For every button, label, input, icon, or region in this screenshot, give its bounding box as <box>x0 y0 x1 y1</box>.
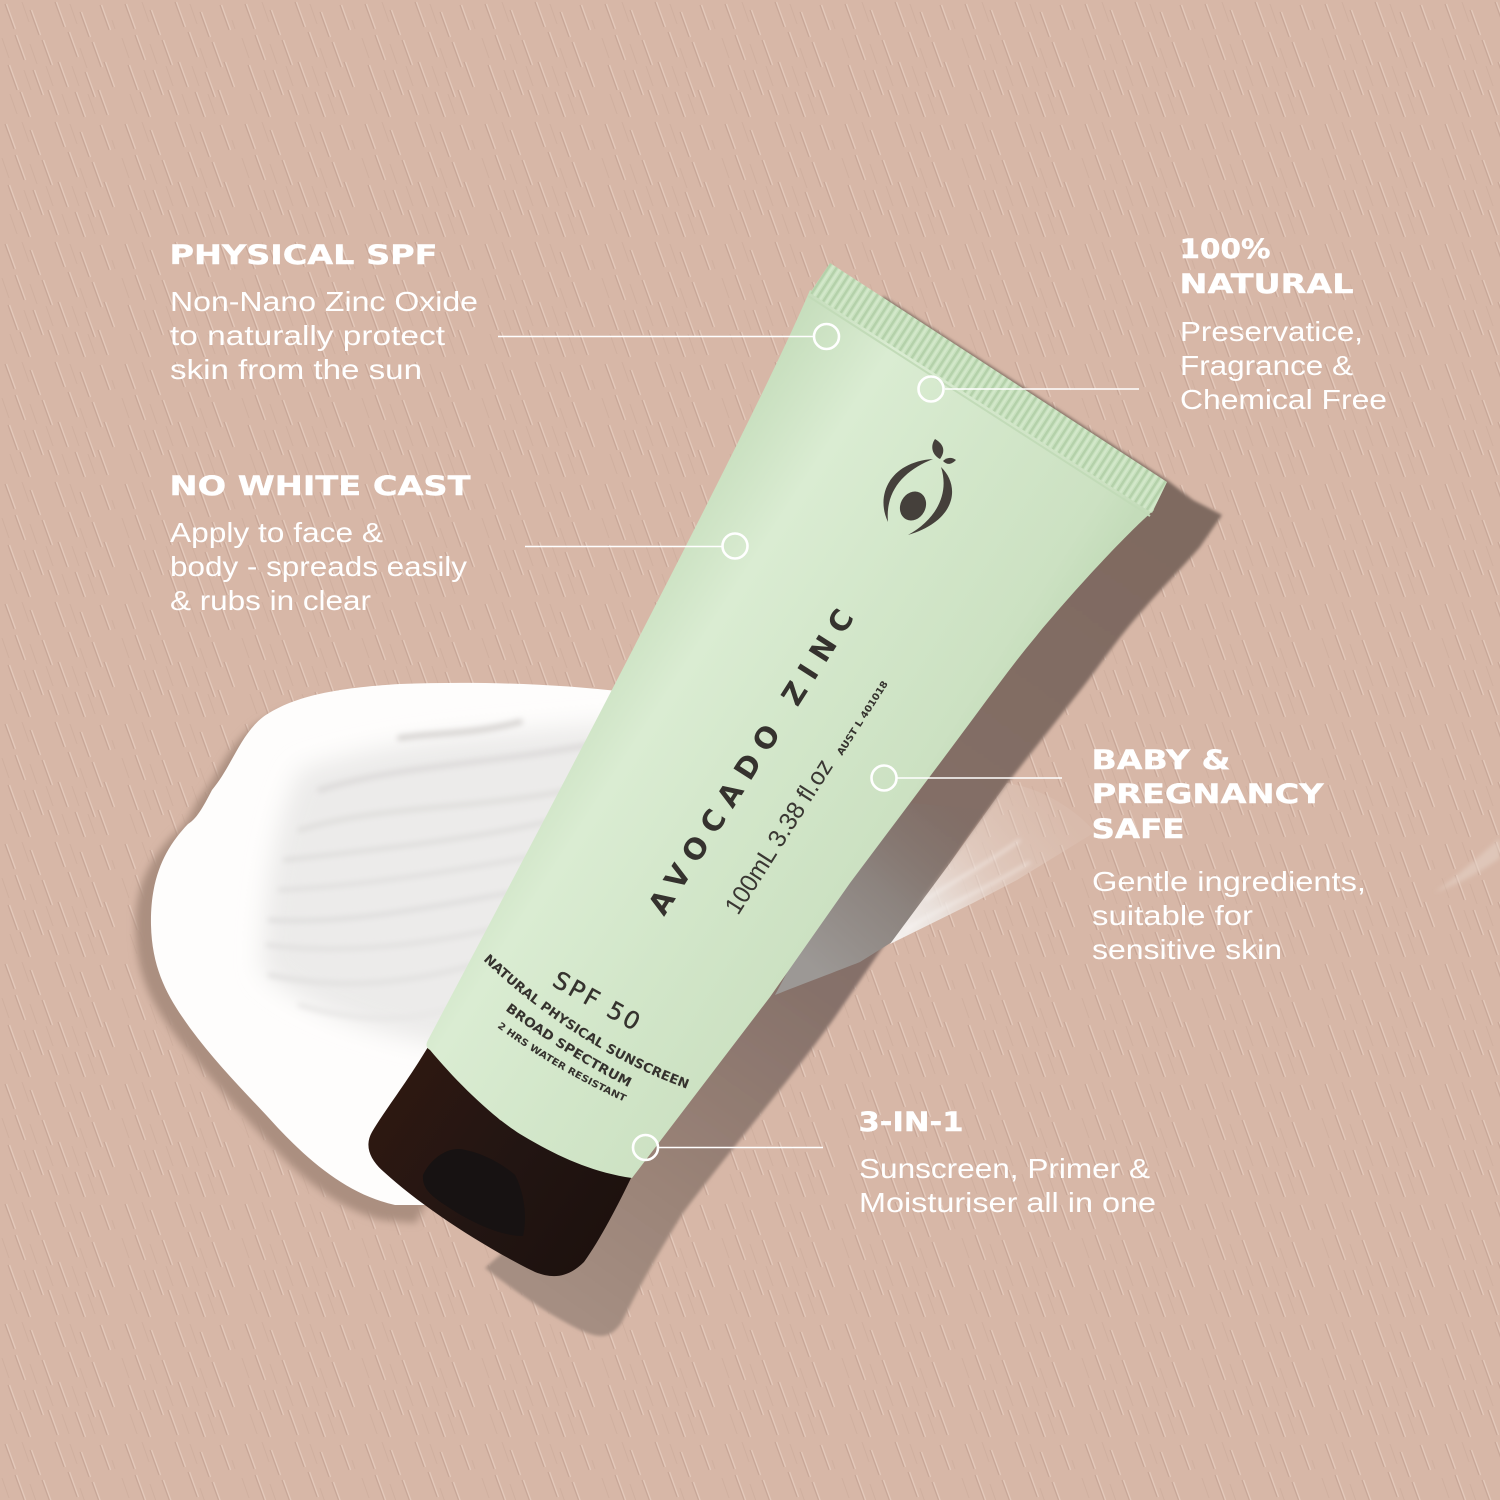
heading: BABY & <box>1092 745 1230 776</box>
streak texture <box>905 840 1030 930</box>
heading: PREGNANCY <box>1092 779 1324 810</box>
tube crimp <box>810 263 1167 513</box>
cream streak right of tube <box>775 783 1500 995</box>
tube label: product name: AVOCADO ZINC <box>641 603 861 921</box>
tube label: SPF 50: SPF 50 <box>548 966 645 1036</box>
pointer <box>633 1135 823 1160</box>
description: Non-Nano Zinc Oxide <box>170 286 478 317</box>
tube label: broad spectrum: BROAD SPECTRUM <box>506 1003 632 1087</box>
streak in shadow <box>775 800 985 995</box>
heading: SAFE <box>1092 814 1184 845</box>
heading <box>1180 234 1354 300</box>
description: Sunscreen, Primer & <box>859 1153 1150 1184</box>
pointer <box>498 324 839 349</box>
heading: PHYSICAL SPF <box>170 240 438 271</box>
description <box>859 1153 1156 1218</box>
description: sensitive skin <box>1092 934 1282 965</box>
description: Moisturiser all in one <box>859 1187 1156 1218</box>
cream swatch <box>135 683 640 1223</box>
tube cap <box>368 1047 632 1276</box>
tube label: volume: 100mL 3.38 fl.oz <box>719 754 839 919</box>
callout: 100% natural <box>918 234 1387 415</box>
heading: NATURAL <box>1180 269 1354 300</box>
heading: 3-IN-1 <box>858 1107 964 1138</box>
cap recess <box>423 1149 525 1236</box>
tube label: water resistant: 2 HRS WATER RESISTANT <box>498 1022 628 1101</box>
description: Fragrance & <box>1180 350 1353 381</box>
product tube <box>368 263 1167 1276</box>
callout: no white cast <box>170 471 748 616</box>
pointer <box>872 766 1062 790</box>
heading: 100% <box>1180 234 1270 265</box>
heading <box>1092 745 1324 845</box>
tube label: AUST code: AUST L 401018 <box>835 679 891 758</box>
faint wisp at right edge <box>1435 838 1500 892</box>
description: skin from the sun <box>170 354 422 385</box>
heading: NO WHITE CAST <box>170 471 471 502</box>
cream brush strokes <box>262 722 620 1050</box>
callout: physical SPF <box>170 240 839 385</box>
tube label: natural physical sunscreen: NATURAL PHYSICAL SUNSCREEN <box>484 954 690 1088</box>
description <box>170 517 467 616</box>
description <box>1092 866 1366 965</box>
description: to naturally protect <box>170 320 445 351</box>
pointer <box>525 534 748 558</box>
description: Preservatice, <box>1180 316 1363 347</box>
description: & rubs in clear <box>170 585 371 616</box>
description: suitable for <box>1092 900 1253 931</box>
description: Apply to face & <box>170 517 383 548</box>
logo: avocado <box>883 439 956 535</box>
tube shadow <box>485 296 1222 1336</box>
callout: 3-in-1 <box>633 1107 1156 1218</box>
description: body - spreads easily <box>170 551 467 582</box>
streak in light <box>890 783 1095 944</box>
description: Chemical Free <box>1180 384 1387 415</box>
description <box>170 286 478 385</box>
description: Gentle ingredients, <box>1092 866 1366 897</box>
tube body <box>427 290 1154 1178</box>
description <box>1180 316 1387 415</box>
callout: baby and pregnancy safe <box>872 745 1366 965</box>
pointer <box>918 376 1139 402</box>
